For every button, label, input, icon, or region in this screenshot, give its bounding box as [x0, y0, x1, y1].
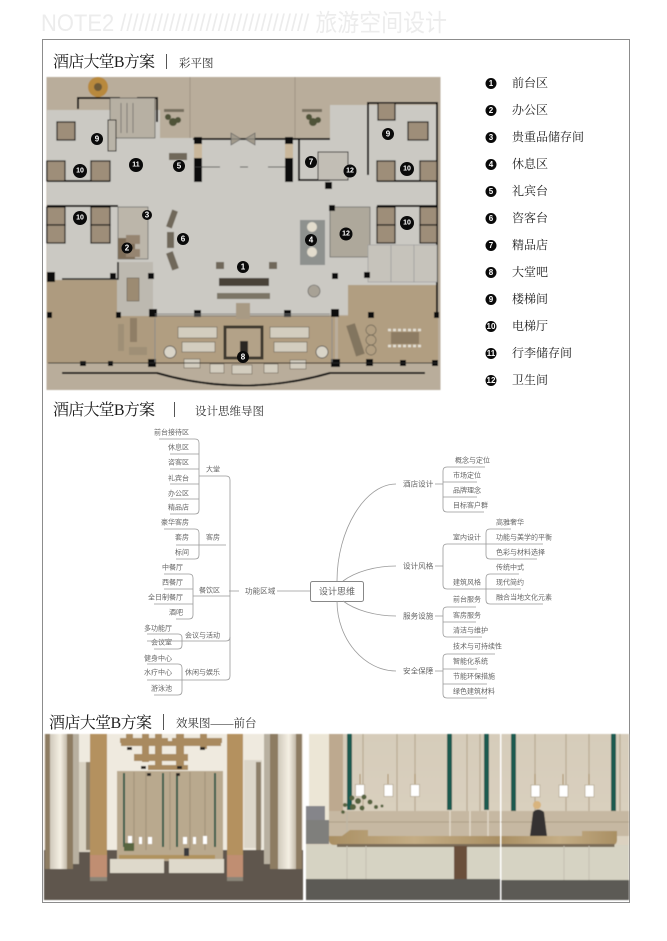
mind map: right branch: 高雅奢华 — [496, 518, 524, 526]
mind map: right branch: 室内设计 — [453, 532, 481, 542]
legend: 休息区 — [512, 157, 548, 171]
mind map: right branch: 传统中式 — [496, 562, 524, 572]
mind map: left branch: 办公区 — [168, 488, 189, 498]
mind map: left branch: 全日制餐厅 — [148, 592, 183, 602]
mind map: centre node: 设计思维 — [319, 586, 355, 596]
legend: 3 — [489, 133, 494, 142]
floor plan: 10 — [403, 220, 411, 226]
mind map: right branch: 建筑风格 — [453, 578, 481, 586]
mind map: left branch: 水疗中心 — [144, 668, 172, 676]
mind map: right branch: 目标客户群 — [453, 500, 488, 510]
heading: mind map: 设计思维导图 — [195, 404, 264, 418]
mind map: left branch: 休闲与娱乐 — [185, 668, 220, 676]
mind map: left branch: 豪华客房 — [161, 518, 189, 526]
legend: 贵重品储存间 — [512, 129, 584, 144]
mind map: right branch: 酒店设计 — [403, 478, 434, 488]
mind map: left branch: 客房 — [206, 532, 220, 542]
floor plan: 5 — [177, 162, 182, 170]
legend: 12 — [487, 376, 496, 385]
mind map: right branch: 节能环保措施 — [453, 672, 495, 680]
heading: renderings: 酒店大堂B方案 — [49, 714, 152, 732]
legend: 5 — [489, 187, 494, 196]
floor plan: 4 — [309, 236, 314, 244]
legend: 9 — [489, 295, 494, 304]
legend: 10 — [487, 322, 496, 331]
rendering: reception desk right — [501, 734, 629, 900]
mind map: left branch: 餐饮区 — [199, 586, 220, 594]
floor plan: 7 — [309, 158, 314, 166]
mind map: left branch: 大堂 — [206, 464, 220, 474]
page title: NOTE2 /////////////////////////////// 旅游空间设计 — [41, 10, 447, 37]
mind map: left branch — [144, 428, 310, 695]
floor plan: 12 — [342, 230, 350, 238]
mind map: left branch: 会议室 — [151, 638, 172, 646]
heading: floor plan: 酒店大堂B方案 — [53, 53, 155, 71]
legend: 8 — [489, 268, 494, 277]
legend: 前台区 — [512, 76, 548, 90]
legend: 1 — [489, 79, 494, 88]
mind map: left branch: 标间 — [175, 548, 189, 556]
heading: floor plan: 彩平图 — [179, 57, 214, 70]
mind map: right branch: 智能化系统 — [453, 656, 488, 666]
floor plan: 2 — [125, 244, 130, 252]
mind map: centre node — [310, 582, 364, 602]
mind map: right branch: 色彩与材料选择 — [496, 548, 545, 556]
mind map: left branch: 会议与活动 — [185, 630, 220, 640]
mind map: left branch: 游泳池 — [151, 684, 172, 692]
heading: floor plan — [53, 53, 214, 71]
mind map: left branch: 健身中心 — [144, 654, 172, 662]
floor plan: 8 — [241, 352, 246, 362]
heading: mind map — [53, 401, 264, 419]
legend: 行李储存间 — [512, 345, 572, 360]
mind map: right branch: 清洁与维护 — [453, 626, 488, 634]
mind map: right branch: 品牌理念 — [453, 486, 481, 494]
legend: 办公区 — [512, 102, 548, 117]
mind map: right branch: 客房服务 — [453, 610, 481, 620]
heading: renderings — [49, 714, 257, 732]
mind map: right branch: 技术与可持续性 — [453, 642, 502, 650]
legend: 大堂吧 — [512, 264, 548, 279]
map markers — [73, 128, 414, 363]
mind map: right branch: 功能与美学的平衡 — [496, 532, 552, 542]
mind map: left branch: 休息区 — [168, 442, 189, 452]
mind map: left branch: 功能区域 — [245, 586, 276, 596]
floor plan: 10 — [403, 166, 411, 172]
rendering: lobby overview — [44, 734, 303, 900]
mind map: right branch: 市场定位 — [453, 470, 481, 480]
rendering: reception desk left — [306, 734, 500, 900]
mind map: right branch: 前台服务 — [453, 594, 481, 604]
mind map: left branch: 多功能厅 — [144, 624, 172, 632]
floor plan: 9 — [386, 130, 391, 138]
legend: 礼宾台 — [512, 183, 548, 198]
mind map: right branch: 融合当地文化元素 — [496, 592, 552, 602]
heading: mind map: 酒店大堂B方案 — [53, 401, 155, 419]
mind map: right branch — [337, 456, 552, 698]
floor plan: 3 — [145, 210, 150, 220]
legend: 卫生间 — [512, 372, 548, 387]
legend: 电梯厅 — [512, 318, 548, 333]
mind map: right branch: 概念与定位 — [455, 456, 490, 464]
mind map: right branch: 服务设施 — [403, 610, 434, 620]
mind map: right branch: 安全保障 — [403, 666, 434, 676]
mind map: right branch: 现代简约 — [496, 578, 524, 586]
legend: 楼梯间 — [512, 291, 548, 306]
floor plan: 12 — [346, 168, 354, 174]
mind map: left branch: 精品店 — [168, 502, 189, 512]
legend: 7 — [489, 241, 494, 250]
legend — [486, 76, 584, 387]
legend: 2 — [489, 106, 494, 115]
floor plan: 10 — [76, 214, 84, 222]
floor plan: 10 — [76, 168, 84, 174]
mind map: left branch: 套房 — [175, 532, 189, 542]
heading: renderings: 效果图——前台 — [176, 716, 257, 730]
floor plan: 1 — [241, 262, 246, 272]
mind map: left branch: 前台接待区 — [154, 428, 189, 436]
legend: 11 — [487, 349, 496, 358]
mind map: right branch: 设计风格 — [403, 560, 434, 570]
legend: 4 — [489, 160, 494, 169]
floor plan — [46, 77, 440, 390]
mind map: left branch: 酒吧 — [169, 608, 183, 616]
floor plan: 6 — [181, 234, 186, 244]
mind map — [144, 428, 552, 698]
mind map: left branch: 中餐厅 — [162, 562, 183, 572]
legend: 咨客台 — [512, 210, 548, 225]
legend: 精品店 — [512, 237, 548, 252]
floor plan: 9 — [95, 134, 100, 144]
mind map: left branch: 西餐厅 — [162, 578, 183, 586]
mind map: left branch: 礼宾台 — [168, 474, 189, 482]
mind map: left branch: 咨客区 — [168, 458, 189, 466]
floor plan: 11 — [132, 162, 140, 168]
mind map: right branch: 绿色建筑材料 — [453, 686, 495, 696]
legend: 6 — [489, 214, 494, 223]
